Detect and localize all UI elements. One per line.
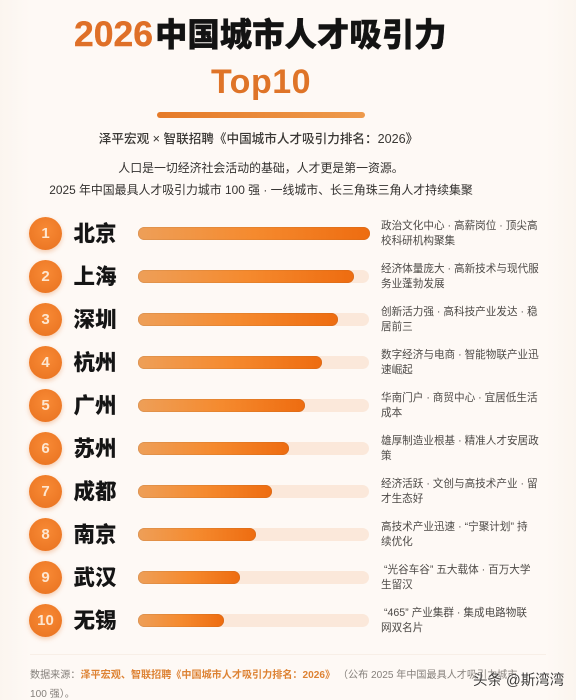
row 2: Shanghai	[26, 260, 539, 298]
row 1: Beijing: 1	[41, 225, 50, 242]
accent line	[157, 112, 365, 118]
row 9: Wuhan: “光谷车谷” 五大载体 · 百万大学	[384, 564, 530, 576]
row 9: Wuhan: 9	[41, 569, 50, 586]
row 4: Hangzhou: 速崛起	[381, 364, 413, 376]
row 5: Guangzhou: 成本	[381, 407, 402, 419]
row 6: Suzhou: 雄厚制造业根基 · 精准人才安居政	[381, 435, 539, 447]
row 2: Shanghai: 上海	[74, 264, 117, 288]
row 4: Hangzhou: 4	[41, 354, 50, 371]
row 5: Guangzhou: 5	[41, 397, 50, 414]
row 1: Beijing	[26, 216, 538, 254]
row 7: Chengdu: 成都	[74, 480, 117, 504]
row 5: Guangzhou: 广州	[74, 394, 117, 418]
row 3: Shenzhen: 3	[41, 311, 50, 328]
row 3: Shenzhen: 深圳	[74, 308, 117, 332]
row 4: Hangzhou: 数字经济与电商 · 智能物联产业迅	[381, 349, 539, 361]
row 3: Shenzhen: 创新活力强 · 高科技产业发达 · 稳	[381, 306, 538, 318]
row 3: Shenzhen: 居前三	[381, 321, 413, 333]
row 1: Beijing: 政治文化中心 · 高薪岗位 · 顶尖高	[381, 220, 538, 232]
intro text	[49, 161, 473, 197]
row 6: Suzhou: 策	[381, 450, 392, 462]
row 1: Beijing: 北京	[74, 222, 117, 246]
row 7: Chengdu: 才生态好	[381, 493, 423, 505]
row 10: Wuxi: “465” 产业集群 · 集成电路物联	[384, 607, 527, 619]
row 7: Chengdu: 经济活跃 · 文创与高技术产业 · 留	[381, 478, 538, 490]
row 2: Shanghai: 务业蓬勃发展	[381, 278, 445, 290]
source line: 泽平宏观 × 智联招聘《中国城市人才吸引力排名：2026》	[99, 132, 418, 146]
intro text: 人口是一切经济社会活动的基础，人才更是第一资源。	[118, 161, 404, 175]
row 8: Nanjing: 8	[41, 526, 50, 543]
row 5: Guangzhou: 华南门户 · 商贸中心 · 宜居低生活	[381, 392, 538, 404]
row 8: Nanjing: 南京	[74, 522, 117, 546]
row 9: Wuhan: 生留汉	[381, 579, 413, 591]
row 5: Guangzhou	[26, 388, 538, 426]
row 6: Suzhou: 6	[41, 440, 50, 457]
row 6: Suzhou	[26, 432, 539, 470]
footer source note: 100 强）。	[30, 689, 75, 700]
row 8: Nanjing: 高技术产业迅速 · “宁聚计划” 持	[381, 521, 528, 533]
row 7: Chengdu: 7	[41, 483, 50, 500]
row 10: Wuxi: 无锡	[74, 608, 117, 632]
row 10: Wuxi: 10	[37, 612, 54, 629]
row 2: Shanghai: 2	[41, 268, 50, 285]
footer source note	[30, 669, 517, 700]
row 4: Hangzhou	[26, 346, 539, 384]
row 7: Chengdu	[26, 474, 538, 512]
title: 2026中国城市人才吸引力	[74, 14, 446, 54]
row 9: Wuhan: 武汉	[74, 566, 117, 590]
watermark: 头条 @斯湾湾	[473, 673, 564, 689]
row 8: Nanjing	[26, 518, 528, 556]
row 10: Wuxi	[26, 604, 527, 642]
intro text: 2025 年中国最具人才吸引力城市 100 强 · 一线城市、长三角珠三角人才持续集聚	[49, 183, 473, 197]
row 2: Shanghai: 经济体量庞大 · 高新技术与现代服	[381, 263, 539, 275]
footer source note: 数据来源：泽平宏观、智联招聘《中国城市人才吸引力排名：2026》 （公布 2025 年中国最具人才吸引力城市	[30, 670, 517, 681]
row 1: Beijing: 校科研机构聚集	[381, 235, 455, 247]
row 8: Nanjing: 续优化	[381, 536, 413, 548]
row 4: Hangzhou: 杭州	[74, 350, 117, 374]
row 10: Wuxi: 网双名片	[381, 622, 423, 634]
row 9: Wuhan	[26, 560, 530, 598]
row 6: Suzhou: 苏州	[74, 436, 117, 460]
subtitle: Top10: Top10	[211, 63, 311, 101]
row 3: Shenzhen	[26, 302, 538, 340]
